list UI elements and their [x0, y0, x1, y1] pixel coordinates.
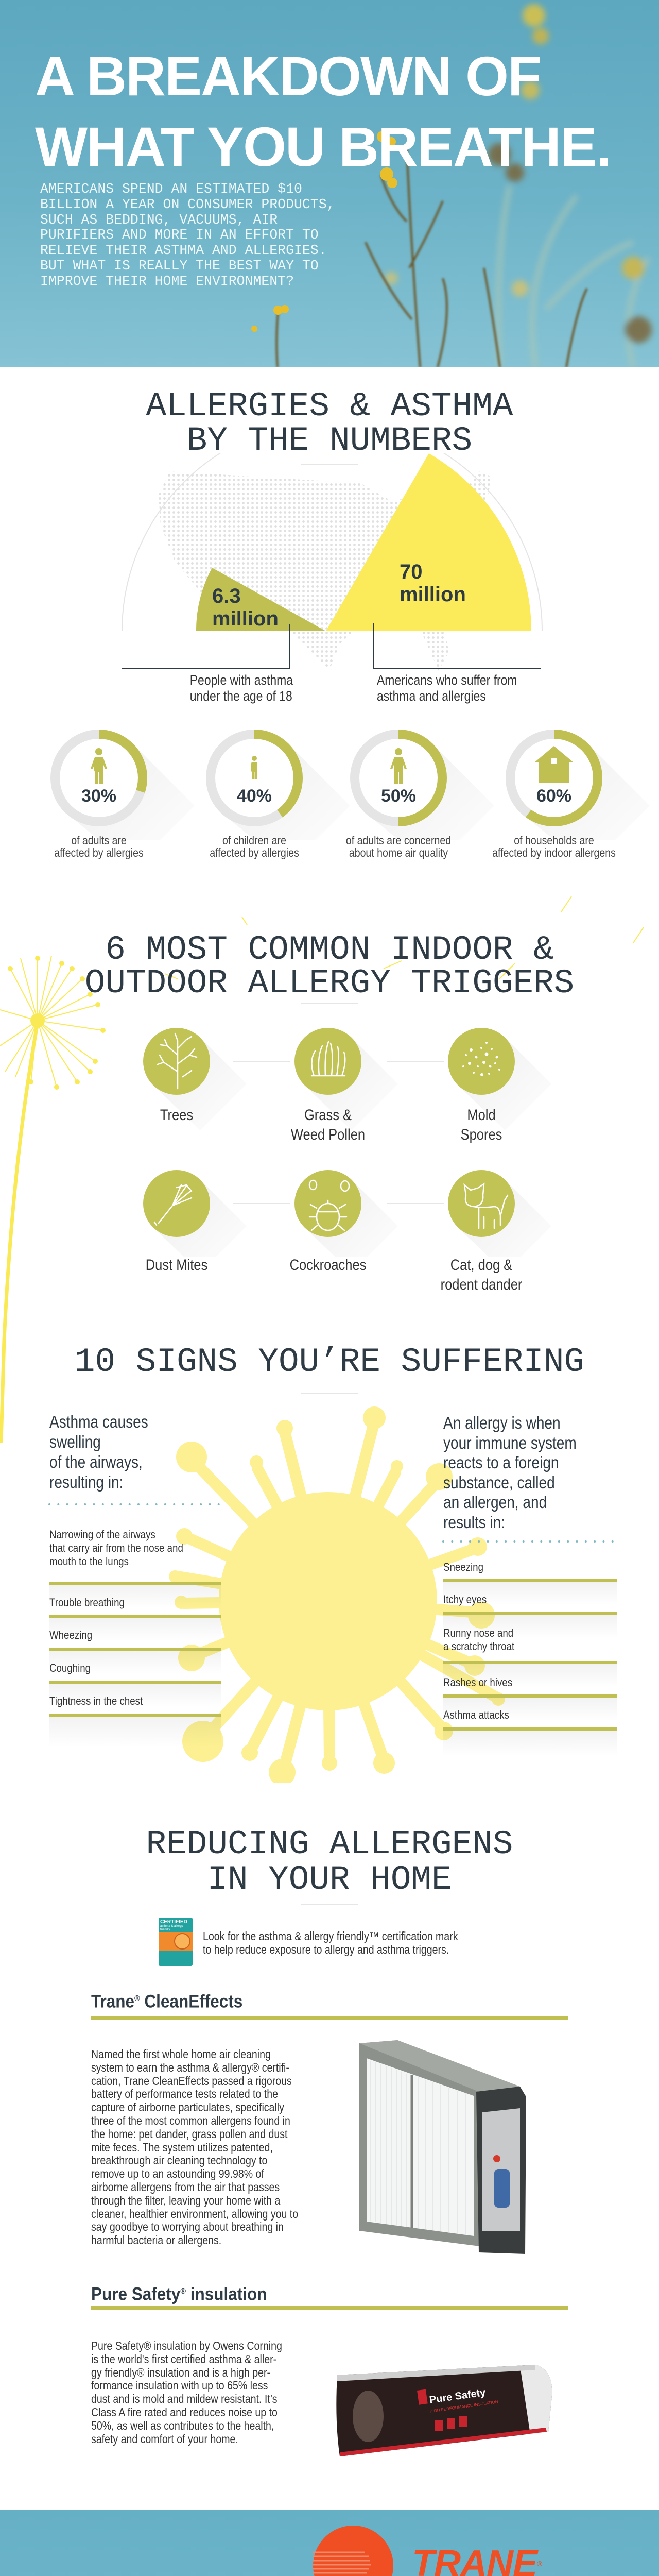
allergy intro text: An allergy is when — [443, 1413, 561, 1432]
heading: allergies & asthma: BY THE NUMBERS — [187, 421, 472, 460]
Pure Safety description: 50%, as well as contributes to the health, — [91, 2419, 274, 2432]
heading: reducing allergens: IN YOUR HOME — [207, 1860, 452, 1899]
chart: US map with wedges — [122, 453, 543, 671]
label: cat dog: rodent dander — [441, 1276, 522, 1293]
CleanEffects description: through the filter, leaving your home with a — [91, 2194, 280, 2207]
asthma symptoms list: mouth to the lungs — [49, 1555, 129, 1568]
CleanEffects description: airborne allergens from the air that passes — [91, 2180, 280, 2194]
splat illustration — [169, 1406, 505, 1783]
donut labels: of children are — [222, 834, 286, 847]
donut percentages: 50% — [381, 786, 416, 806]
donut labels: of households are — [514, 834, 594, 847]
Pure Safety description — [91, 2339, 282, 2446]
hero intro paragraph: BUT WHAT IS REALLY THE BEST WAY TO — [40, 258, 319, 274]
donut labels: affected by indoor allergens — [492, 846, 616, 859]
CleanEffects description: harmful bacteria or allergens. — [91, 2233, 221, 2247]
allergy symptoms list: a scratchy throat — [443, 1640, 514, 1653]
certification text: to help reduce exposure to allergy and asthma triggers. — [203, 1943, 449, 1956]
icon: certification badge: CERTIFIED — [160, 1919, 187, 1925]
donut: 50% — [355, 734, 442, 822]
CleanEffects description: battery of performance tests related to the — [91, 2087, 278, 2100]
Pure Safety description: safety and comfort of your home. — [91, 2432, 238, 2446]
allergy intro text: an allergen, and — [443, 1493, 547, 1512]
Pure Safety description: Pure Safety® insulation by Owens Corning — [91, 2339, 282, 2352]
heading: reducing allergens: REDUCING ALLERGENS — [146, 1825, 513, 1863]
asthma symptoms list: Tightness in the chest — [49, 1694, 143, 1707]
CleanEffects description: three of the most common allergens found in — [91, 2114, 290, 2127]
allergy intro text: your immune system — [443, 1433, 577, 1452]
logo: Trane — [313, 2526, 543, 2576]
icon: cat — [464, 1184, 508, 1228]
allergy symptoms list: Runny nose and — [443, 1626, 513, 1639]
allergy symptoms list — [443, 1561, 515, 1721]
hero background — [0, 0, 659, 367]
label: mold — [461, 1107, 502, 1143]
icon: child — [251, 756, 257, 779]
hero intro paragraph: PURIFIERS AND MORE IN AN EFFORT TO — [40, 227, 319, 243]
asthma symptoms list — [49, 1528, 183, 1707]
label: mold: Spores — [461, 1126, 502, 1143]
hero intro paragraph: AMERICANS SPEND AN ESTIMATED $10 — [40, 181, 302, 197]
heading: allergies & asthma — [146, 387, 513, 460]
donut: 40% — [211, 734, 298, 822]
asthma symptoms list: Wheezing — [49, 1629, 92, 1641]
allergy intro text: reacts to a foreign — [443, 1453, 559, 1472]
label: people with asthma — [190, 672, 293, 704]
asthma symptoms list: that carry air from the nose and — [49, 1541, 183, 1554]
label: Americans who suffer — [377, 672, 517, 704]
allergy intro text: results in: — [443, 1513, 505, 1531]
Pure Safety description: dust and is mold and mildew resistant. It’s — [91, 2392, 277, 2405]
hero intro paragraph: IMPROVE THEIR HOME ENVIRONMENT? — [40, 274, 294, 289]
CleanEffects description: Named the first whole home air cleaning — [91, 2047, 271, 2061]
CleanEffects description: remove up to an astounding 99.98% of — [91, 2167, 264, 2180]
label: Americans who suffer: asthma and allergies — [377, 688, 486, 704]
product: insulation roll: Pure Safety — [429, 2387, 487, 2406]
hero title: A BREAKDOWN OF — [35, 45, 541, 107]
trigger labels — [146, 1107, 522, 1293]
label: grass: Grass & — [304, 1107, 352, 1124]
label: grass — [291, 1107, 365, 1143]
donut percentages: 30% — [81, 786, 116, 806]
label: cat dog: Cat, dog & — [450, 1257, 512, 1274]
hero intro paragraph: BILLION A YEAR ON CONSUMER PRODUCTS, — [40, 197, 335, 212]
stat: 6.3 million: million — [212, 607, 279, 630]
allergy intro text — [443, 1413, 577, 1531]
bars and shadows for symptom lists — [48, 1503, 617, 1739]
icon: house — [534, 746, 574, 783]
donut labels: affected by allergies — [210, 846, 299, 859]
asthma intro text: resulting in: — [49, 1472, 123, 1492]
donut labels — [54, 834, 616, 859]
asthma intro text: Asthma causes — [49, 1412, 148, 1431]
heading: allergy triggers: OUTDOOR ALLERGY TRIGGERS — [85, 964, 574, 1003]
donut charts — [50, 730, 621, 840]
CleanEffects description: the home: pet dander, grass pollen and dust — [91, 2127, 288, 2141]
heading: allergies & asthma: ALLERGIES & ASTHMA — [146, 387, 513, 426]
asthma symptoms list: Trouble breathing — [49, 1596, 125, 1609]
stat: 6.3 million — [212, 585, 279, 630]
product: insulation roll: HIGH PERFORMANCE INSULATION — [429, 2399, 498, 2414]
label: trees: Trees — [160, 1107, 193, 1124]
label: cockroaches: Cockroaches — [290, 1257, 366, 1274]
product: insulation roll — [336, 2365, 552, 2456]
asthma intro text: of the airways, — [49, 1452, 143, 1471]
CleanEffects description: say goodbye to worrying about breathing in — [91, 2220, 284, 2233]
hero title — [35, 45, 611, 178]
donut labels: about home air quality — [349, 846, 448, 859]
product: air cleaner — [359, 2040, 526, 2254]
trigger icons grid — [143, 1028, 530, 1251]
donut percentages — [81, 786, 571, 806]
heading: allergy triggers: 6 MOST COMMON INDOOR & — [105, 930, 554, 969]
Pure Safety description: gy friendly® insulation and is a high per- — [91, 2366, 270, 2379]
CleanEffects description: system to earn the asthma & allergy® certifi- — [91, 2061, 289, 2074]
certification text: Look for the asthma & allergy friendly™ certification mark — [203, 1929, 458, 1943]
stat: 70 million — [400, 561, 466, 606]
heading: allergy triggers — [85, 930, 574, 1003]
label: grass: Weed Pollen — [291, 1126, 365, 1143]
allergy symptoms list: Itchy eyes — [443, 1593, 487, 1606]
icon: adult — [91, 748, 107, 784]
donut percentages: 40% — [237, 786, 272, 806]
CleanEffects description: cleaner, healthier environment, allowing you to — [91, 2207, 298, 2221]
icon: mold spores — [462, 1042, 500, 1076]
donut: 30% — [55, 734, 143, 822]
donut labels: of adults are — [71, 834, 127, 847]
wedge: 6.3 million — [196, 568, 326, 631]
label: Americans who suffer: Americans who suffer from — [377, 672, 517, 688]
icon: certification badge — [159, 1918, 193, 1966]
decoration: dandelion — [0, 896, 644, 1443]
heading: reducing allergens — [146, 1825, 513, 1899]
label: dust mites: Dust Mites — [146, 1257, 207, 1274]
label: people with asthma: under the age of 18 — [190, 688, 292, 704]
asthma symptoms list: Coughing — [49, 1662, 91, 1674]
stat: 70 million: million — [400, 583, 466, 606]
footer background — [0, 2510, 659, 2576]
donut percentages: 60% — [536, 786, 571, 806]
CleanEffects description: capture of airborne particulates, specifically — [91, 2100, 284, 2114]
label: people with asthma: People with asthma — [190, 672, 293, 688]
heading: Trane CleanEffects: Trane® CleanEffects — [91, 1992, 242, 2012]
CleanEffects description — [91, 2047, 298, 2247]
allergy symptoms list: Rashes or hives — [443, 1676, 512, 1689]
label: mold: Mold — [467, 1107, 496, 1124]
CleanEffects description: mite feces. The system utilizes patented, — [91, 2141, 273, 2154]
Pure Safety description: is the world's first certified asthma & aller- — [91, 2352, 276, 2366]
donut labels: affected by allergies — [54, 846, 144, 859]
hero title: WHAT YOU BREATHE. — [35, 115, 611, 178]
hero intro paragraph — [40, 181, 335, 289]
certification text — [203, 1929, 458, 1956]
heading: Pure Safety insulation: Pure Safety® insulation — [91, 2284, 267, 2304]
Pure Safety description: Class A fire rated and reduces noise up to — [91, 2405, 278, 2419]
icon: cockroaches — [309, 1180, 349, 1230]
label: cat dog — [441, 1257, 522, 1293]
allergy symptoms list: Asthma attacks — [443, 1708, 509, 1721]
icon: duster — [154, 1185, 192, 1225]
hero intro paragraph: RELIEVE THEIR ASTHMA AND ALLERGIES. — [40, 243, 327, 258]
CleanEffects description: cation, Trane CleanEffects passed a rigorous — [91, 2074, 292, 2088]
heading: 10 signs: 10 SIGNS YOU’RE SUFFERING — [75, 1343, 584, 1381]
Pure Safety description: formance insulation with up to 65% less — [91, 2379, 268, 2392]
asthma symptoms list: Narrowing of the airways — [49, 1528, 155, 1541]
donut: 60% — [510, 734, 598, 822]
wedge: 70 million — [326, 453, 531, 631]
stat: 6.3 million: 6.3 — [212, 585, 241, 607]
icon: grass — [311, 1042, 345, 1076]
asthma intro text — [49, 1412, 148, 1492]
asthma intro text: swelling — [49, 1432, 101, 1451]
hero intro paragraph: SUCH AS BEDDING, VACUUMS, AIR — [40, 212, 278, 228]
allergy intro text: substance, called — [443, 1472, 555, 1492]
CleanEffects description: breakthrough air cleaning technology to — [91, 2154, 267, 2167]
donut labels: of adults are concerned — [346, 834, 451, 847]
icon: tree — [158, 1033, 197, 1089]
icon: adult 2 — [390, 748, 407, 784]
allergy symptoms list: Sneezing — [443, 1561, 483, 1573]
icon: certification badge: asthma & allergy friendly — [160, 1925, 183, 1931]
stat: 70 million: 70 — [400, 561, 422, 583]
